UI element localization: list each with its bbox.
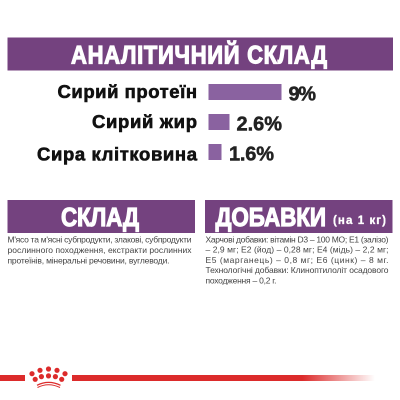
- heading banner: additives: [205, 200, 392, 233]
- heading banner: additives: (на 1 кг): [333, 215, 386, 227]
- row: crude fat: [92, 111, 282, 136]
- icon: royal crown: [29, 366, 68, 388]
- row: crude fat: 2.6%: [236, 114, 282, 136]
- heading banner: ingredients: [8, 200, 195, 233]
- text block: ingredients: М'ясо та м'ясні субпродукти, злакові, субпродукти: [8, 234, 192, 244]
- text block: ingredients: [8, 234, 192, 266]
- heading banner: additives: ДОБАВКИ: [216, 204, 326, 232]
- row: crude fibre: Сира клітковина: [37, 144, 198, 164]
- text block: additives: Е5 (марганець) – 0,8 мг; Е6 (цинк) – 8 мг.: [206, 255, 388, 265]
- text block: ingredients: рослинного походження, екстракти рослинних: [8, 245, 192, 255]
- panel: additives: [205, 200, 392, 286]
- row: crude fibre: [37, 144, 274, 166]
- heading banner: ingredients: СКЛАД: [61, 204, 139, 232]
- text block: ingredients: протеїнів, мінеральні речовини, вуглеводи.: [8, 256, 170, 266]
- heading banner: analytical composition: АНАЛІТИЧНИЙ СКЛАД: [71, 40, 327, 69]
- row: crude fat: Сирий жир: [92, 111, 197, 132]
- text block: additives: Харчові добавки: вітамін D3 – 100 МО; Е1 (залізо): [206, 234, 389, 244]
- text block: additives: походження – 0,2 г.: [206, 276, 276, 286]
- footer: red line with crown logo: [0, 366, 375, 388]
- panel: analytical composition: [8, 38, 393, 166]
- text block: additives: [206, 234, 389, 286]
- text block: additives: Технологічні добавки: Клиноптилоліт осадового: [206, 265, 389, 275]
- row: crude protein: Сирий протеїн: [58, 81, 197, 102]
- heading banner: analytical composition: [8, 38, 393, 70]
- row: crude protein: [58, 81, 316, 106]
- row: crude protein: 9%: [288, 84, 316, 106]
- row: crude fibre: 1.6%: [229, 144, 274, 166]
- panel: ingredients: [8, 200, 195, 266]
- text block: additives: – 2,9 мг; Е2 (йод) – 0,28 мг; Е4 (мідь) – 2,2 мг;: [206, 244, 388, 254]
